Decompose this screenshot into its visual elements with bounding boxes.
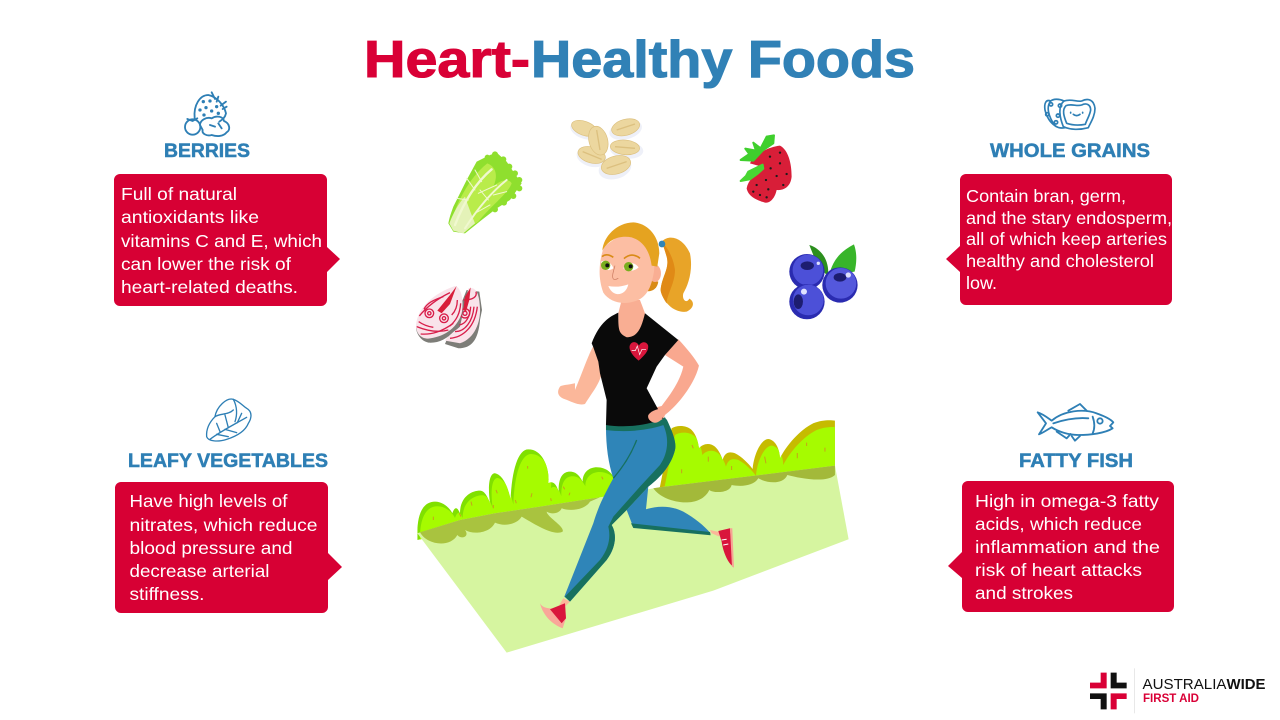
icon: leafy vegetables <box>207 399 251 441</box>
callout: fatty fish: and strokes <box>975 583 1073 603</box>
callout: whole grains: all of which keep arteries <box>966 229 1167 249</box>
park ground and bushes <box>413 417 849 653</box>
logo text: WIDE <box>1226 677 1266 693</box>
ponytail <box>661 238 693 312</box>
heading: whole grains: WHOLE GRAINS <box>990 141 1150 162</box>
callout: berries: Full of natural <box>121 184 237 204</box>
callout: whole grains <box>946 174 1172 305</box>
shirt <box>592 313 678 426</box>
callout: leafy vegetables: blood pressure and <box>130 538 292 558</box>
callout: fatty fish: risk of heart attacks <box>975 560 1142 580</box>
face <box>600 235 655 303</box>
callout: fatty fish: inflammation and the <box>975 537 1160 557</box>
section: fatty fish <box>948 404 1174 612</box>
logo text: FIRST AID <box>1143 691 1199 705</box>
logo: Australia Wide First Aid <box>1090 668 1266 713</box>
neck <box>618 300 645 339</box>
salmon steaks <box>416 286 482 348</box>
front shoe <box>540 598 570 628</box>
blueberries <box>789 244 858 319</box>
section: whole grains <box>946 99 1172 305</box>
callout: berries: can lower the risk of <box>121 254 291 274</box>
eyes <box>601 255 640 271</box>
back shoe <box>710 528 734 568</box>
heart emblem <box>630 342 648 361</box>
heading: leafy vegetables: LEAFY VEGETABLES <box>128 451 328 472</box>
smile <box>608 284 628 294</box>
callout: leafy vegetables: decrease arterial <box>130 561 270 581</box>
logo text: AUSTRALIA <box>1142 677 1227 693</box>
salad leaf <box>448 151 522 233</box>
callout: whole grains: and the stary endosperm, <box>966 208 1172 228</box>
title: Heart- <box>364 31 530 89</box>
back leg <box>627 487 711 533</box>
callout: fatty fish <box>948 481 1174 612</box>
callout: whole grains: low. <box>966 273 997 293</box>
left arm <box>558 346 602 404</box>
callout: leafy vegetables: stiffness. <box>130 584 204 604</box>
callout: fatty fish: acids, which reduce <box>975 514 1142 534</box>
callout: fatty fish: High in omega-3 fatty <box>975 491 1159 511</box>
heading: fatty fish: FATTY FISH <box>1019 451 1133 472</box>
callout: berries: heart-related deaths. <box>121 277 298 297</box>
callout: berries <box>114 174 340 306</box>
right hand <box>648 408 665 423</box>
front leg <box>564 422 675 602</box>
hair band <box>659 241 665 247</box>
heading: berries: BERRIES <box>164 141 250 162</box>
callout: berries: antioxidants like <box>121 207 259 227</box>
logo text <box>1142 677 1266 705</box>
callout: berries: vitamins C and E, which <box>121 231 322 251</box>
icon: berries <box>185 92 229 136</box>
right arm <box>648 339 699 421</box>
icon: fatty fish <box>1038 404 1113 441</box>
callout: leafy vegetables <box>115 482 342 613</box>
icon: whole grains <box>1045 99 1095 129</box>
title <box>364 31 915 89</box>
section: berries <box>114 92 340 306</box>
strawberry <box>741 135 792 203</box>
callout: whole grains: Contain bran, germ, <box>966 186 1126 206</box>
callout: leafy vegetables: nitrates, which reduce <box>130 515 318 535</box>
central illustration <box>413 116 858 653</box>
logo mark <box>1090 668 1135 713</box>
oat grains <box>568 116 644 183</box>
callout: leafy vegetables: Have high levels of <box>130 491 288 511</box>
callout: whole grains: healthy and cholesterol <box>966 251 1154 271</box>
title: Healthy Foods <box>531 31 915 89</box>
runner <box>540 222 734 628</box>
back hair and ear <box>645 280 658 291</box>
hair <box>602 222 659 267</box>
section: leafy vegetables <box>115 399 342 613</box>
